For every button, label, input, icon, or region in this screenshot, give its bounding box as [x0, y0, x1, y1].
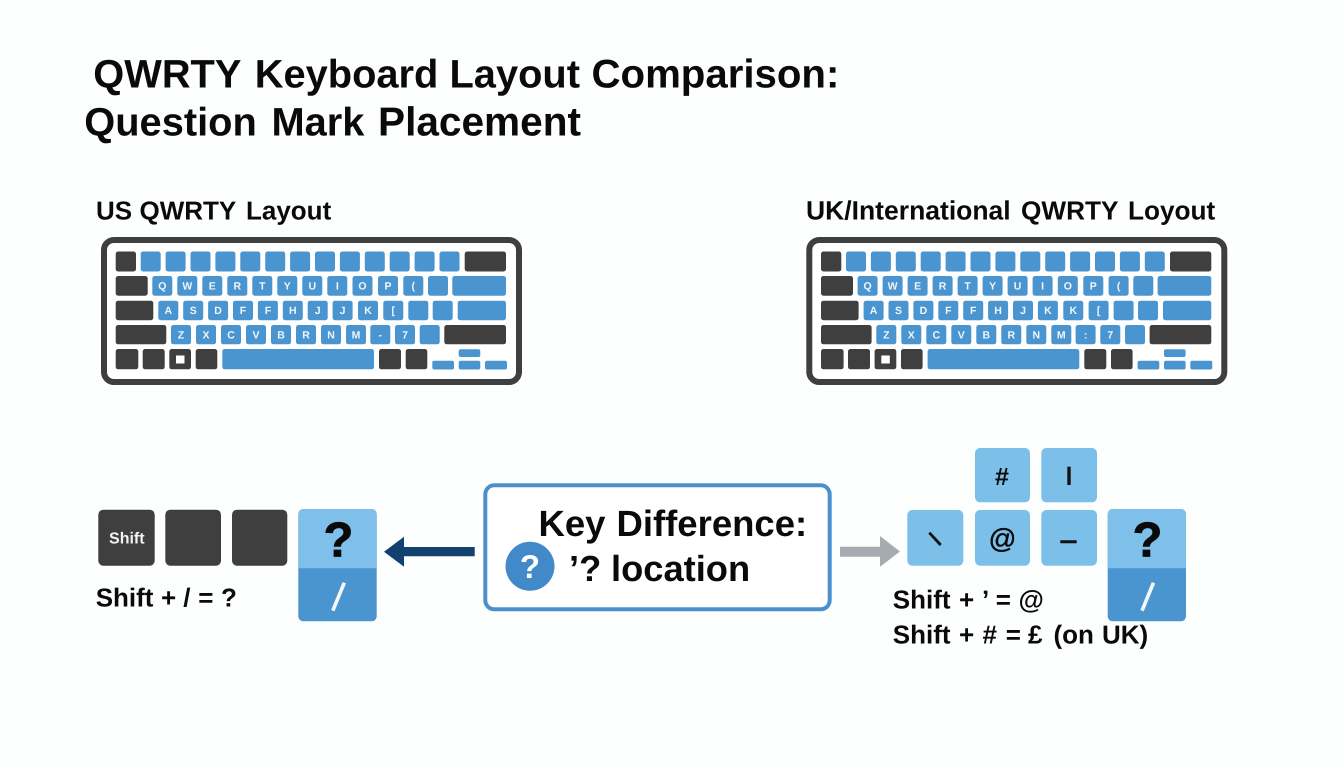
US row 4: bottom letter keys: X	[202, 329, 210, 341]
panel: US keyboard	[104, 240, 519, 382]
US row 1: function keys	[116, 252, 506, 272]
UK row 3: home row keys	[821, 301, 1211, 320]
arrow: pointing to US key	[384, 537, 475, 567]
US question mark key	[298, 509, 377, 621]
US row 2: QWERTY keys: O	[358, 281, 367, 293]
UK shortcut text: Shift	[893, 619, 951, 649]
UK question mark key: ?	[1133, 514, 1162, 568]
UK row 3: home row keys: S	[895, 305, 902, 317]
UK shortcut text: (on	[1054, 619, 1094, 649]
UK row 4: bottom letter keys: B	[983, 329, 991, 341]
US row 3: home row keys: J	[340, 305, 346, 317]
UK row 3: home row keys: K	[1044, 305, 1052, 317]
UK row 3: home row keys: F	[945, 305, 952, 317]
US row 2: QWERTY keys	[116, 276, 506, 296]
UK row 5: space bar and modifiers	[821, 349, 1212, 370]
US row 2: QWERTY keys: U	[309, 281, 316, 293]
Shift key: Shift	[109, 530, 145, 547]
US row 4: bottom letter keys: M	[352, 329, 361, 341]
UK row 3: home row keys: K	[1070, 305, 1078, 317]
US key sequence	[98, 510, 287, 566]
title: Mark	[272, 100, 365, 144]
key: at sign: @	[989, 523, 1016, 554]
UK row 2: QWERTY keys: U	[1014, 281, 1021, 293]
callout: key difference: Difference:	[616, 503, 807, 544]
US row 3: home row keys: D	[214, 305, 222, 317]
icon: question mark badge: ?	[520, 548, 540, 585]
US row 3: home row keys: [	[392, 305, 396, 317]
key: dash	[1041, 510, 1097, 566]
UK row 3: home row keys: F	[970, 305, 977, 317]
UK shortcut text: @	[1018, 584, 1044, 614]
US row 2: QWERTY keys: W	[182, 281, 192, 293]
UK shortcut text: =	[1006, 619, 1021, 649]
heading: US layout: US	[96, 195, 132, 225]
key: at sign	[975, 510, 1030, 566]
US row 3: home row keys: J	[315, 305, 321, 317]
US shortcut text: +	[161, 583, 176, 613]
UK row 4: bottom letter keys: Z	[883, 329, 890, 341]
US shortcut text: Shift	[96, 583, 154, 613]
UK row 2: QWERTY keys: T	[964, 281, 971, 293]
UK row 4: bottom letter keys: :	[1084, 329, 1087, 341]
heading: US layout: Layout	[246, 195, 332, 225]
US row 4: bottom letter keys: R	[302, 329, 310, 341]
title: Layout	[450, 52, 580, 96]
UK row 4: bottom letter keys: 7	[1107, 329, 1113, 341]
UK row 3: home row keys: D	[920, 305, 928, 317]
US row 4: bottom letter keys: V	[252, 329, 260, 341]
UK row 2: QWERTY keys: O	[1064, 281, 1072, 293]
US row 3: home row keys: H	[289, 305, 297, 317]
US row 2: QWERTY keys: R	[234, 281, 242, 293]
callout: key difference: Key	[538, 503, 606, 544]
UK row 4: bottom letter keys	[821, 325, 1211, 344]
key: pipe	[1041, 448, 1097, 502]
UK row 2: QWERTY keys: W	[888, 281, 898, 293]
US row 2: QWERTY keys: Y	[284, 281, 291, 293]
arrow: pointing to UK keys	[840, 536, 900, 567]
blank dark key	[165, 510, 221, 566]
UK row 4: bottom letter keys: M	[1057, 329, 1066, 341]
US shortcut text: ?	[221, 583, 237, 613]
UK row 2: QWERTY keys: I	[1041, 281, 1044, 293]
US row 4: bottom letter keys	[116, 325, 506, 344]
title	[84, 51, 839, 144]
US row 5: space bar and modifiers	[116, 349, 507, 370]
title: Keyboard	[255, 52, 438, 96]
UK shortcut text: =	[996, 584, 1011, 614]
title: Question	[84, 100, 257, 144]
UK shortcut text: +	[959, 619, 974, 649]
heading: UK layout: UK/International	[806, 195, 1011, 225]
key: hash	[975, 448, 1030, 502]
US row 3: home row keys: K	[364, 305, 372, 317]
UK row 2: QWERTY keys: Q	[864, 281, 872, 293]
panel: UK keyboard	[809, 240, 1224, 382]
UK row 3: home row keys: J	[1020, 305, 1026, 317]
heading: US layout: QWRTY	[140, 195, 236, 225]
UK row 2: QWERTY keys: Y	[989, 281, 996, 293]
UK row 2: QWERTY keys	[821, 276, 1211, 296]
UK row 3: home row keys: H	[994, 305, 1002, 317]
US row 2: QWERTY keys: T	[259, 281, 266, 293]
US shortcut text: =	[198, 583, 213, 613]
US row 4: bottom letter keys: B	[277, 329, 285, 341]
Shift key	[98, 510, 155, 566]
title: Placement	[378, 98, 581, 144]
UK shortcut text: UK)	[1102, 619, 1148, 649]
US shortcut text: /	[183, 583, 191, 613]
UK row 4: bottom letter keys: X	[908, 329, 915, 341]
US row 4: bottom letter keys: -	[379, 329, 383, 341]
title: Comparison:	[592, 51, 839, 96]
US row 2: QWERTY keys: E	[209, 281, 216, 293]
UK row 2: QWERTY keys: R	[939, 281, 947, 293]
UK row 1: function keys	[821, 252, 1211, 272]
US row 3: home row keys: F	[240, 305, 247, 317]
UK row 4: bottom letter keys: V	[958, 329, 965, 341]
UK shortcut text: #	[982, 619, 998, 649]
UK row 4: bottom letter keys: R	[1008, 329, 1016, 341]
heading: UK layout: QWRTY	[1021, 195, 1119, 225]
UK question mark key	[1108, 509, 1186, 621]
UK row 2: QWERTY keys: P	[1090, 281, 1097, 293]
US row 3: home row keys	[116, 301, 506, 320]
UK row 3: home row keys: A	[870, 305, 878, 317]
UK shortcut text: Shift	[893, 584, 951, 614]
UK row 2: QWERTY keys: (	[1117, 281, 1121, 293]
UK key cluster	[907, 448, 1097, 566]
callout: key difference: ’?	[569, 548, 601, 589]
UK shortcut text: £	[1028, 619, 1043, 649]
US row 2: QWERTY keys: Q	[158, 281, 166, 293]
US row 2: QWERTY keys: (	[412, 281, 416, 293]
US row 4: bottom letter keys: 7	[402, 329, 408, 341]
icon: question mark badge	[506, 542, 554, 591]
UK shortcut text: +	[959, 584, 974, 614]
US row 4: bottom letter keys: Z	[178, 329, 185, 341]
blank dark key	[232, 510, 287, 566]
US row 2: QWERTY keys: I	[336, 281, 339, 293]
UK row 4: bottom letter keys: N	[1033, 329, 1040, 341]
US row 3: home row keys: S	[190, 305, 197, 317]
US question mark key: ?	[324, 514, 353, 568]
UK row 4: bottom letter keys: C	[933, 329, 941, 341]
US row 4: bottom letter keys: N	[327, 329, 335, 341]
callout: key difference	[485, 485, 830, 609]
heading: UK layout: Loyout	[1128, 195, 1216, 225]
UK shortcut text	[893, 584, 1148, 649]
US row 4: bottom letter keys: C	[227, 329, 235, 341]
US row 3: home row keys: F	[265, 305, 272, 317]
UK shortcut text: ’	[982, 584, 988, 614]
title: QWRTY	[93, 52, 241, 96]
UK row 2: QWERTY keys: E	[914, 281, 921, 293]
UK row 3: home row keys: [	[1097, 305, 1101, 317]
US row 3: home row keys: A	[165, 305, 173, 317]
key: hash: #	[995, 463, 1009, 491]
callout: key difference: location	[611, 548, 750, 589]
key: backslash	[907, 510, 963, 566]
US row 2: QWERTY keys: P	[384, 281, 392, 293]
